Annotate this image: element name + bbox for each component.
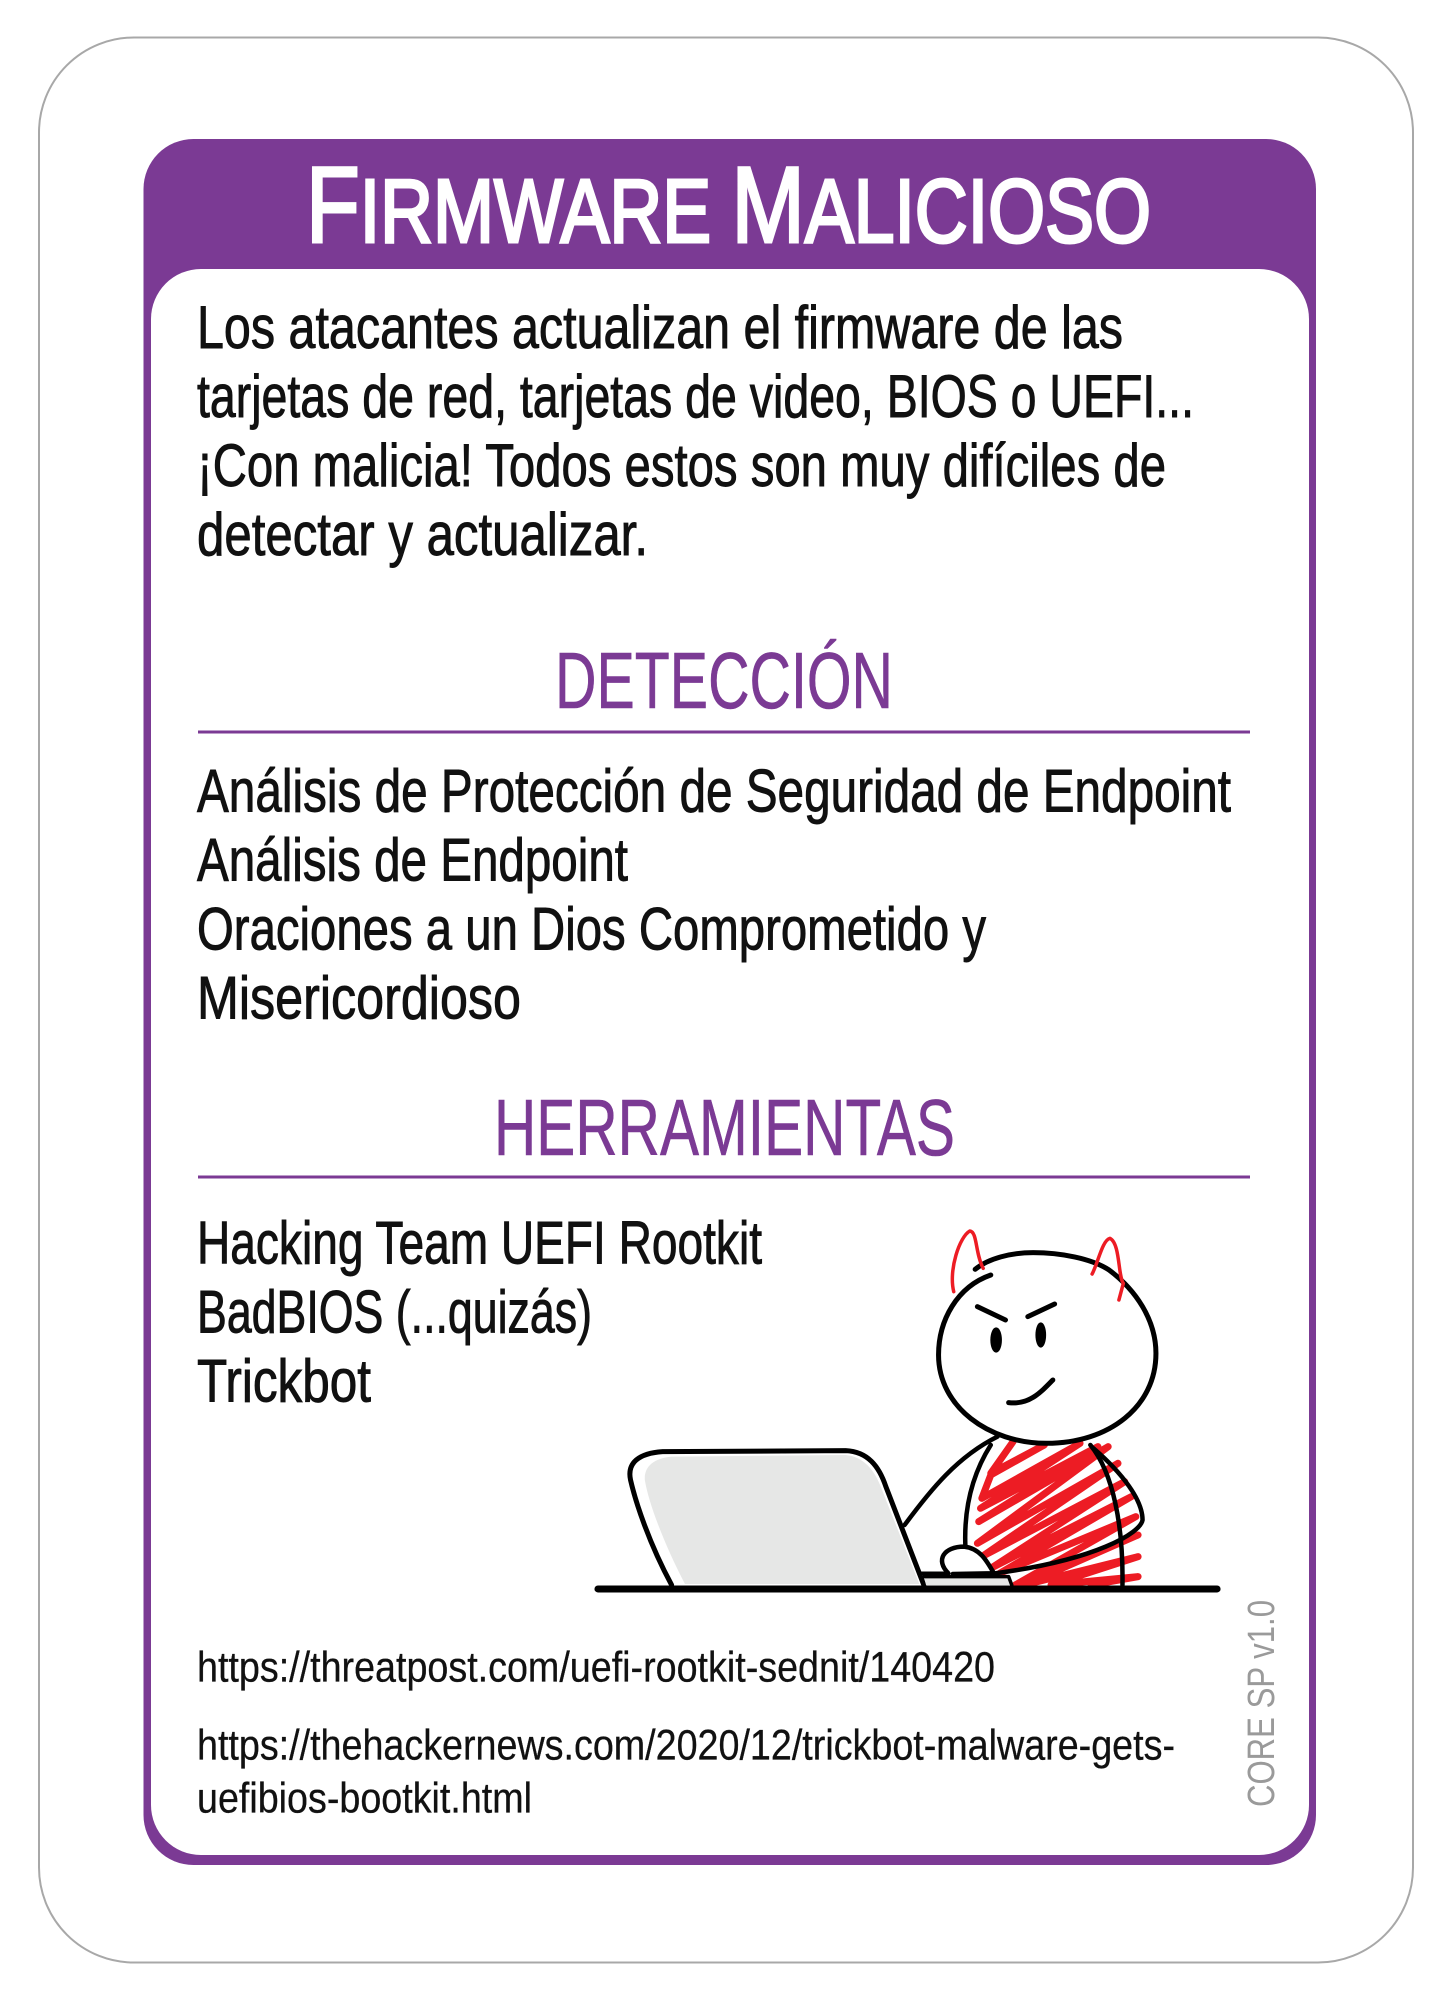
intro text: tarjetas de red, tarjetas de video, BIOS o UEFI... <box>197 363 1194 430</box>
panel: purple frame <box>144 139 1316 1865</box>
table line <box>598 1585 1217 1592</box>
horns <box>952 1231 1123 1300</box>
illustration: devil stick figure at laptop <box>598 1231 1217 1589</box>
reference links <box>197 1644 1175 1822</box>
intro text: detectar y actualizar. <box>197 501 648 568</box>
reference links: https://threatpost.com/uefi-rootkit-sednit/140420 <box>197 1644 995 1692</box>
intro text <box>197 294 1194 568</box>
laptop <box>630 1451 924 1585</box>
panel: white content area <box>151 269 1309 1855</box>
heading: herramientas: HERRAMIENTAS <box>494 1083 955 1172</box>
intro text: Los atacantes actualizan el firmware de las <box>197 294 1123 361</box>
tools list <box>197 1210 762 1414</box>
tools list: Hacking Team UEFI Rootkit <box>197 1210 762 1276</box>
reference links: uefibios-bootkit.html <box>197 1774 532 1822</box>
heading: detección: DETECCIÓN <box>555 636 893 725</box>
title: FIRMWARE MALICIOSO <box>306 144 1151 265</box>
red scribble shirt <box>977 1442 1138 1585</box>
detection list: Análisis de Endpoint <box>197 826 628 894</box>
body and arms <box>905 1437 1143 1585</box>
reference links: https://thehackernews.com/2020/12/trickbot-malware-gets- <box>197 1722 1175 1770</box>
tools list: BadBIOS (...quizás) <box>197 1278 592 1346</box>
detection list: Misericordioso <box>197 964 521 1032</box>
intro text: ¡Con malicia! Todos estos son muy difíciles de <box>197 432 1166 499</box>
detection list: Oraciones a un Dios Comprometido y <box>197 896 986 962</box>
detection list <box>197 758 1231 1032</box>
tools list: Trickbot <box>197 1348 371 1414</box>
head <box>939 1253 1156 1443</box>
version label: CORE SP v1.0 <box>1241 1600 1283 1807</box>
